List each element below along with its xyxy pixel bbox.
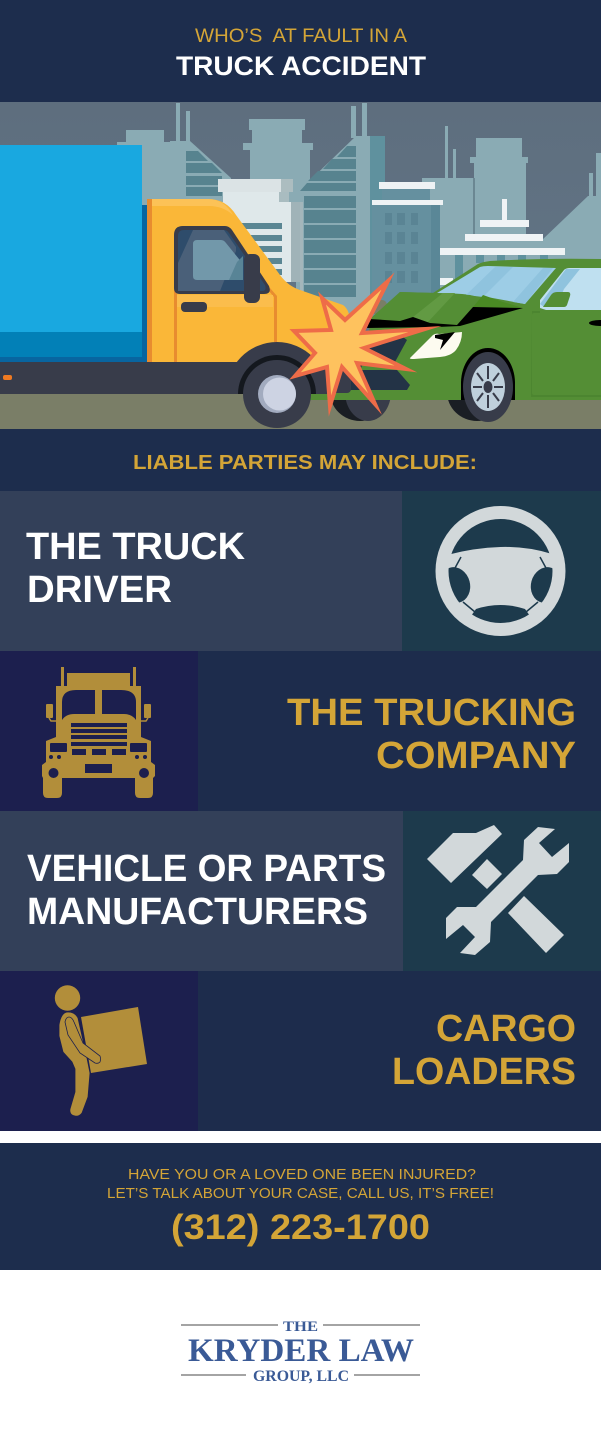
icon: hammer and wrench: [427, 825, 569, 955]
icon: person carrying box: [55, 985, 147, 1116]
city skyline: [117, 103, 601, 328]
headlight: [410, 332, 462, 359]
illustration: truck and car collision in city: [0, 102, 601, 429]
icon: steering wheel: [436, 506, 566, 636]
band: liable parties heading: LIABLE PARTIES MAY INCLUDE:: [133, 452, 477, 474]
logo: the kryder law group: KRYDER LAW: [188, 1333, 414, 1369]
car tires behind body: [332, 400, 365, 421]
side window: [540, 268, 601, 310]
label: the truck driver: [26, 526, 246, 611]
label: vehicle or parts manufacturers: MANUFACTURERS: [27, 891, 368, 933]
cab: [147, 199, 350, 362]
logo: the kryder law group: THE: [283, 1319, 318, 1335]
car: [310, 259, 601, 422]
call to action panel: [0, 1143, 601, 1270]
call to action text: LET’S TALK ABOUT YOUR CASE, CALL US, IT’S FREE!: [107, 1185, 494, 1202]
call to action text: [107, 1166, 494, 1202]
label: cargo loaders: LOADERS: [392, 1051, 576, 1093]
label: the truck driver: THE TRUCK: [26, 526, 246, 568]
windshield: [437, 266, 556, 304]
explosion star: [294, 281, 425, 406]
truck front wheel: [237, 342, 327, 428]
logo: the kryder law group: [181, 1319, 420, 1385]
call to action text: HAVE YOU OR A LOVED ONE BEEN INJURED?: [128, 1166, 476, 1183]
title line 1: WHO’S AT FAULT IN A: [195, 25, 407, 47]
logo: the kryder law group: GROUP, LLC: [253, 1368, 349, 1385]
car body: [310, 259, 601, 400]
front wheel: [461, 348, 515, 400]
chassis: [0, 362, 245, 394]
icon: truck front: [42, 667, 155, 798]
label: the trucking company: COMPANY: [376, 735, 576, 777]
label: vehicle or parts manufacturers: [27, 848, 386, 933]
label: cargo loaders: [392, 1008, 576, 1093]
title line 2: TRUCK ACCIDENT: [176, 51, 427, 81]
label: the trucking company: THE TRUCKING: [287, 692, 576, 734]
label: cargo loaders: CARGO: [436, 1008, 576, 1050]
band: liable parties heading: [0, 429, 601, 491]
header: title: [0, 0, 601, 102]
panel: cargo loaders: [0, 971, 601, 1131]
ground: [0, 394, 601, 429]
phone number: (312) 223-1700: [171, 1208, 430, 1247]
panel: the truck driver: [0, 491, 601, 651]
label: vehicle or parts manufacturers: VEHICLE OR PARTS: [27, 848, 386, 890]
label: the trucking company: [287, 692, 576, 777]
panel: the trucking company: [0, 651, 601, 811]
panel: vehicle or parts manufacturers: [0, 811, 601, 971]
cargo box: [0, 145, 147, 362]
crumple: [367, 307, 523, 328]
label: the truck driver: DRIVER: [27, 569, 172, 611]
hood: [372, 292, 476, 317]
truck: [0, 145, 350, 394]
